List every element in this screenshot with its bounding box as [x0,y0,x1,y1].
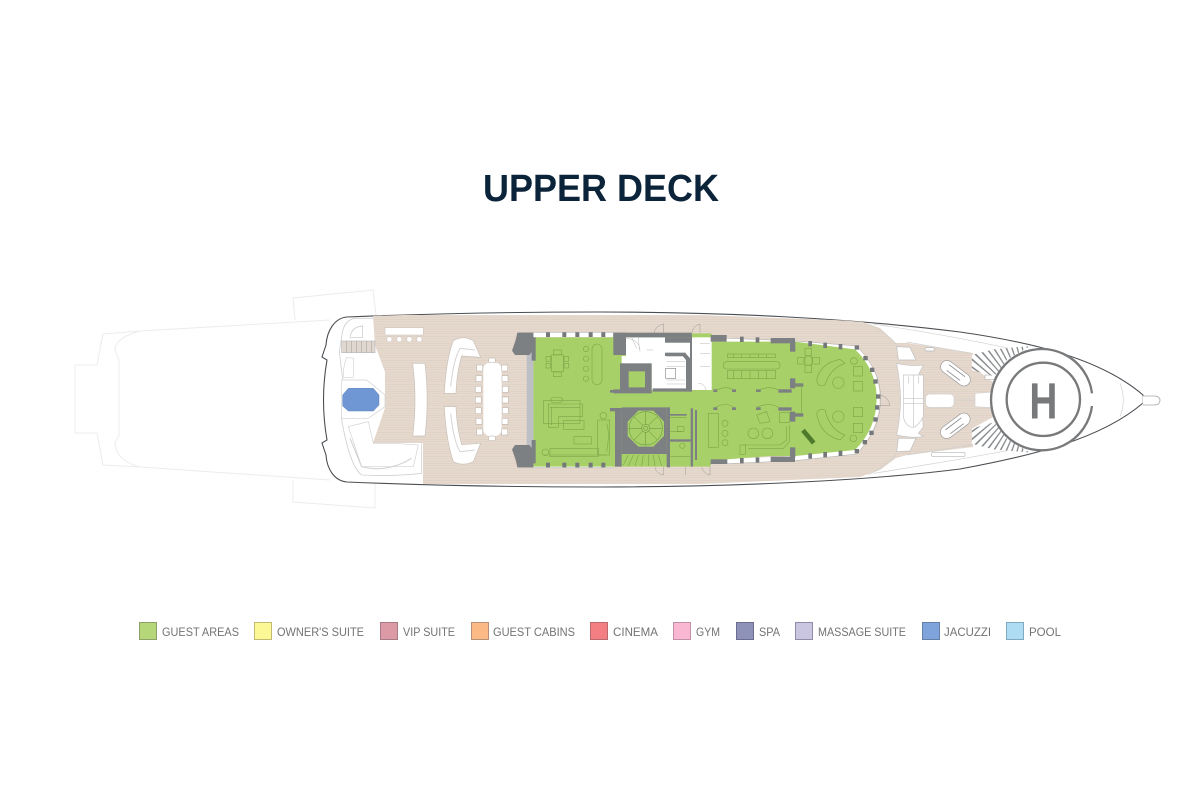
swim platform steps [342,326,375,353]
side bulwark lines [868,324,1123,475]
lower stair fan [972,422,1028,452]
helipad circle [991,349,1094,450]
title: UPPER DECK [483,168,720,210]
aft deckhouse corners [512,333,533,467]
bar stools [387,337,422,342]
round table with chairs [798,348,819,373]
stern lounge seating [343,357,418,469]
legend item: jacuzzi: JACUZZI [944,625,991,639]
teak deck [373,315,993,484]
deckhouse interior [513,323,890,475]
rescue boat upper [938,358,973,389]
legend [140,622,1061,640]
main lounge sofa group [542,397,610,457]
bar counter [385,328,423,335]
forward curved sofas [817,358,863,442]
yacht hull [322,312,1143,487]
legend item: jacuzzi [922,622,991,640]
upper curved sofa [444,338,481,393]
legend item: owner's suite [254,622,364,640]
window band [533,335,877,465]
legend item: guest areas [140,622,239,640]
guest stair hatch object [801,429,815,445]
legend item: spa [736,622,781,640]
forward dining table [723,354,780,379]
stair details [627,337,710,391]
structural walls [532,333,803,467]
legend item: spa: SPA [759,625,781,639]
lower staircase [623,455,662,466]
aft corner blocks [513,333,533,467]
legend item: massage suite: MASSAGE SUITE [818,625,906,639]
dining table [475,358,508,441]
legend item: massage suite [796,622,906,640]
mid lounge [708,385,802,454]
legend item: VIP suite [380,622,455,640]
aft dining table [546,350,569,377]
tender on deck [903,375,923,427]
bow and foredeck [868,324,1160,475]
stern details [339,318,533,476]
legend item: guest cabins: GUEST CABINS [493,625,575,639]
white service rooms and stairs [622,337,712,390]
legend item: cinema [590,622,659,640]
lower curved sofa [444,407,481,464]
window posts [546,332,880,467]
washroom fixtures [670,417,690,457]
legend item: gym [674,622,720,640]
forward stairs to deck [897,347,916,452]
hatch and capstan fittings [926,391,1017,408]
legend item: pool: POOL [1029,625,1061,639]
legend item: owner's suite: OWNER'S SUITE [277,625,364,639]
helipad H: H [1029,373,1057,430]
interior furniture [542,344,863,466]
legend item: VIP suite: VIP SUITE [403,625,455,639]
stern bulwark lines [339,318,422,476]
bowsprit [1143,396,1160,405]
upper stair fan [972,346,1028,376]
jacuzzi [343,388,379,411]
legend item: guest cabins [472,622,575,640]
ghost outline: tender/platform behind the stern [75,290,376,508]
spiral staircase [629,412,662,445]
jacuzzi surround [342,380,385,418]
deck doors [654,323,890,475]
rescue boat lower [938,411,973,441]
legend item: cinema: CINEMA [613,625,659,639]
curved bench [413,363,427,436]
legend item: pool [1006,622,1061,640]
guest areas floor [533,333,877,467]
tender cradle [897,363,923,437]
aft oval table and stools [583,344,602,385]
legend item: gym: GYM [696,625,720,639]
legend item: guest areas: GUEST AREAS [162,625,239,639]
gangway fittings [925,348,995,457]
